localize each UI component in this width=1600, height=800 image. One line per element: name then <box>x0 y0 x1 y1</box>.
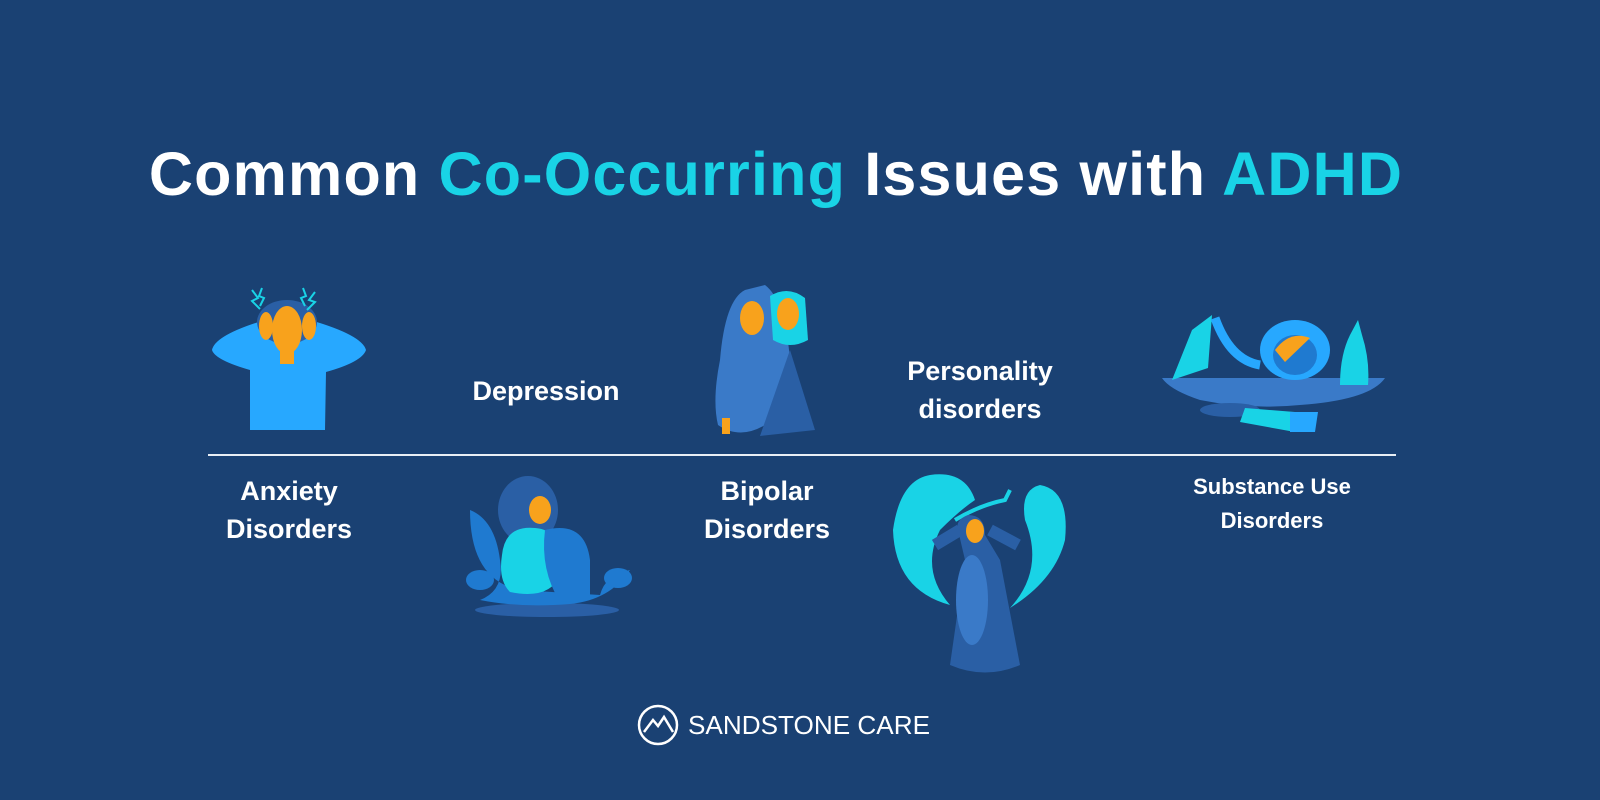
label: anxiety disorders: Anxiety <box>240 476 338 506</box>
label: anxiety disorders <box>226 476 352 544</box>
label: depression: Depression <box>472 376 620 406</box>
icon: personality ghosts <box>893 474 1066 672</box>
label: substance use disorders: Substance Use <box>1193 474 1351 499</box>
logo: sandstone care: SANDSTONE CARE <box>688 710 930 740</box>
label: personality disorders: disorders <box>918 394 1042 424</box>
label: bipolar disorders <box>704 476 830 544</box>
icon: anxiety person <box>212 288 366 430</box>
label: anxiety disorders: Disorders <box>226 514 352 544</box>
title: Common Co-Occurring Issues with ADHD <box>149 140 1403 208</box>
label: substance use disorders: Disorders <box>1221 508 1323 533</box>
label: bipolar disorders: Disorders <box>704 514 830 544</box>
label: personality disorders <box>907 356 1053 424</box>
label: substance use disorders <box>1193 474 1351 533</box>
label: bipolar disorders: Bipolar <box>720 476 814 506</box>
icon: depression person <box>466 476 632 617</box>
logo: sandstone care <box>639 706 930 744</box>
icon: substance use <box>1162 315 1385 432</box>
label: personality disorders: Personality <box>907 356 1053 386</box>
icon: bipolar two faces <box>715 285 815 436</box>
